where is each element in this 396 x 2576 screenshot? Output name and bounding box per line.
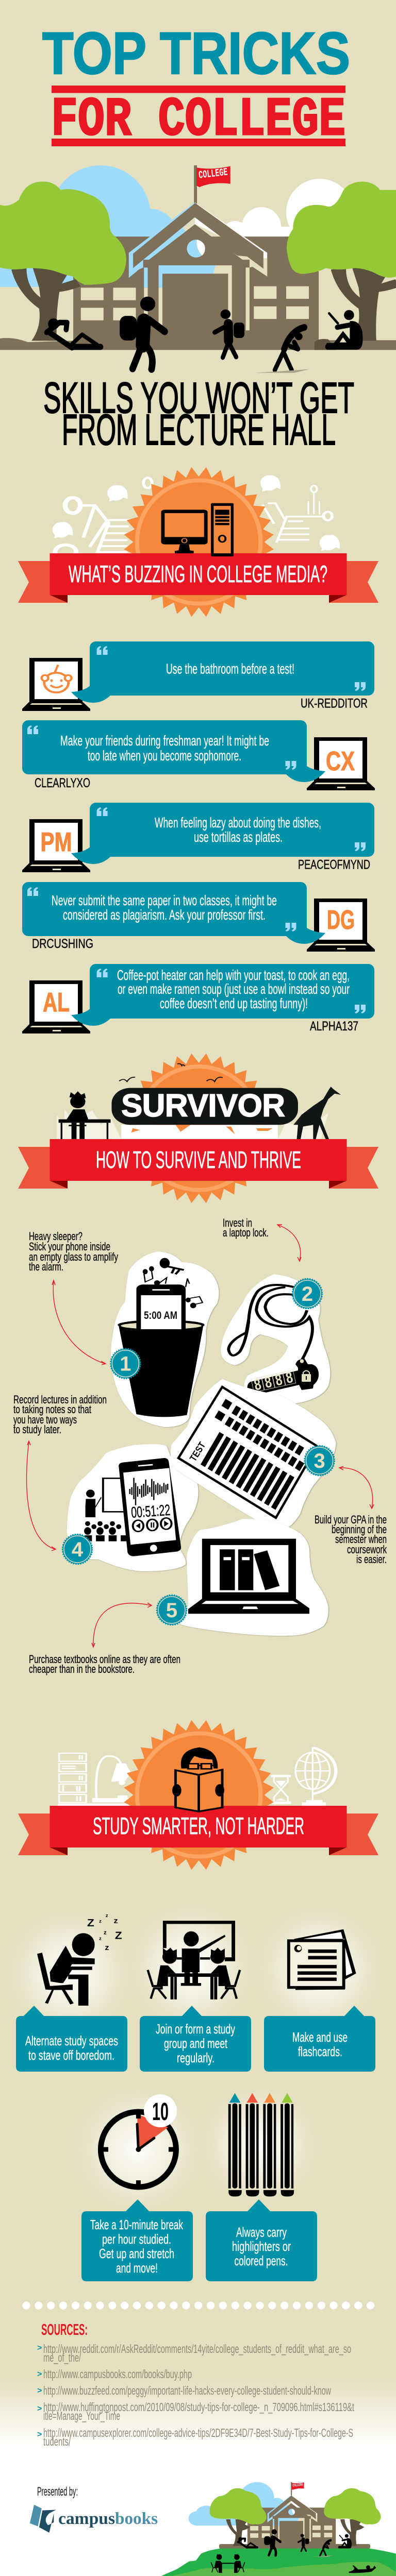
campusbooks logo: campus	[58, 2510, 115, 2528]
speech bubble: considered as plagiarism. Ask your professor first.	[63, 907, 266, 923]
quote 3	[22, 803, 374, 872]
badge 4	[63, 1534, 92, 1564]
tip 3 illustration: test paper	[171, 1379, 336, 1532]
tip 1 text	[29, 1230, 118, 1273]
right tree	[287, 181, 396, 341]
lock digits: 8	[263, 1374, 273, 1392]
books	[220, 1549, 235, 1590]
icon: clock	[101, 2094, 177, 2187]
computer tower overlap	[211, 551, 234, 556]
badge 2	[293, 1279, 322, 1309]
orange peeks through grass	[131, 1125, 273, 1134]
desk lamp	[58, 1756, 131, 1806]
tip box 2	[140, 2006, 251, 2072]
tip box 3: flashcards.	[298, 2044, 342, 2059]
dotted separator	[22, 2301, 374, 2310]
survivor scene	[57, 1064, 341, 1142]
tip box 4: and move!	[116, 2260, 158, 2276]
mini clouds	[189, 2482, 285, 2526]
tip box 4	[81, 2199, 193, 2281]
sources list: >	[37, 2430, 42, 2439]
hourglass	[271, 1775, 291, 1804]
zzz: z	[106, 1913, 108, 1918]
presented by: Presented by:	[37, 2485, 78, 2499]
mini campus scene	[157, 2482, 396, 2576]
laptop avatar: PM	[22, 819, 90, 872]
tip box 5: Always carry	[236, 2225, 287, 2240]
icon: clock: 10	[152, 2098, 169, 2126]
icon: desktop computer	[161, 503, 234, 556]
tip 4 text: to study later.	[13, 1423, 61, 1436]
book stack	[59, 1753, 86, 1803]
tip 2 text: Invest in	[223, 1216, 252, 1229]
speech bubble	[22, 882, 325, 944]
sources list: >	[37, 2370, 42, 2379]
laptop	[202, 1539, 296, 1600]
tip 1 text: Stick your phone inside	[29, 1240, 110, 1253]
icon: flashcards	[289, 1929, 356, 1990]
laptop avatar: reddit	[22, 658, 90, 711]
speech bubble	[71, 641, 374, 703]
username: DRCUSHING	[32, 937, 93, 951]
quote 1	[22, 641, 374, 711]
tip 5 text	[29, 1653, 180, 1675]
globe	[295, 1748, 336, 1806]
username: PEACEOFMYND	[298, 857, 370, 872]
arrow 5	[92, 1603, 152, 1647]
zzz: Z	[115, 1929, 122, 1941]
music notes	[143, 1258, 203, 1308]
background white lower area	[0, 2396, 396, 2576]
playback controls	[133, 1518, 172, 1532]
laptop avatar: PM: PM	[40, 827, 72, 857]
zzz	[87, 1913, 122, 1952]
icon glow backgrounds	[9, 1906, 381, 2210]
sources list: itle=Manage_Your_Time	[43, 2409, 120, 2422]
tip box 2: regularly.	[177, 2050, 214, 2065]
tip 4 text	[13, 1393, 107, 1436]
left tree	[0, 181, 126, 341]
arrow 3	[339, 1466, 374, 1509]
speech bubble: Use the bathroom before a test!	[166, 660, 294, 677]
icon: colored pens	[228, 2093, 294, 2196]
speech bubble	[71, 803, 374, 864]
section badge: media	[124, 467, 274, 617]
badge 1	[111, 1349, 140, 1378]
speech bubble: Make your friends during freshman year! It might be	[60, 733, 269, 749]
icon: sleeping at desk	[37, 1913, 122, 2006]
person at desk	[59, 1091, 111, 1142]
mini students	[238, 2529, 352, 2557]
icon: student reading book	[181, 1748, 218, 1770]
tip 2 illustration: laptop lock	[221, 1274, 330, 1405]
sources list: me_of_the/	[43, 2351, 81, 2364]
tip box 1: Alternate study spaces	[25, 2033, 118, 2048]
waveform	[130, 1478, 168, 1505]
tip 1 text: Heavy sleeper?	[29, 1230, 82, 1243]
zzz: z	[99, 1936, 102, 1941]
ribbon: how to survive	[18, 1139, 378, 1189]
white blob	[111, 1251, 219, 1427]
speech bubble	[71, 964, 374, 1026]
fade band	[0, 2380, 396, 2447]
username: UK-REDDITOR	[301, 697, 368, 711]
tip box 5: highlighters or	[232, 2239, 291, 2254]
badge 5	[157, 1595, 187, 1625]
pen 3	[263, 2093, 276, 2196]
badge 3: 3	[314, 1450, 325, 1472]
sky blue cloud	[0, 165, 178, 287]
badge 2: 2	[302, 1283, 313, 1306]
speech bubble: too late when you become sophomore.	[88, 748, 241, 764]
glass	[119, 1326, 203, 1417]
college campus scene	[0, 165, 396, 373]
recording phone	[119, 1458, 181, 1556]
tip box 4: Get up and stretch	[99, 2246, 174, 2261]
white cloud	[222, 179, 353, 248]
open book	[172, 1770, 224, 1811]
white blob	[177, 1519, 328, 1636]
tip 2 text	[223, 1216, 269, 1239]
badge 3	[305, 1446, 334, 1476]
combination lock	[248, 1358, 319, 1395]
campusbooks logo	[30, 2505, 158, 2533]
college building	[73, 165, 319, 350]
tip box 2: Join or form a study	[156, 2021, 235, 2037]
section badge: study	[124, 1720, 274, 1870]
speech bubble: use tortillas as plates.	[194, 829, 283, 845]
tip box 1	[16, 2006, 127, 2072]
tip box 3	[264, 2006, 375, 2072]
survivor title: SURVIVOR	[121, 1088, 285, 1124]
sources list: >	[37, 2404, 42, 2413]
sources list: tudents/	[43, 2435, 71, 2448]
tip box 4: Take a 10-minute break	[90, 2217, 184, 2232]
white grass	[57, 1109, 328, 1140]
lecture hall	[103, 1478, 126, 1512]
badge 1: 1	[120, 1353, 131, 1376]
laptop avatar: AL: AL	[43, 988, 70, 1018]
cable	[228, 1285, 312, 1360]
test sheet	[178, 1387, 317, 1518]
laptop avatar: CX: CX	[326, 747, 355, 776]
arrow 4	[27, 1441, 56, 1551]
arrow 1	[52, 1280, 106, 1365]
tip 2 text: a laptop lock.	[223, 1226, 269, 1239]
white blob	[171, 1379, 336, 1532]
speech bubble: coffee doesn’t end up tasting funny)!	[160, 995, 308, 1011]
pen 2	[246, 2093, 259, 2196]
ribbon: what's buzzing	[18, 551, 378, 603]
pen 4	[280, 2093, 294, 2196]
tip 4 text: Record lectures in addition	[13, 1393, 107, 1406]
tip 1 text: an empty glass to amplify	[29, 1250, 118, 1263]
quote 2	[22, 720, 375, 790]
circuit and speech bubble decoration	[53, 475, 340, 560]
phone	[136, 1284, 186, 1334]
giraffe	[293, 1087, 341, 1140]
mini ground	[219, 2544, 370, 2549]
tip 4 text: to taking notes so that	[13, 1403, 91, 1416]
large answer squares	[218, 1401, 229, 1419]
tip box 2: group and meet	[164, 2036, 228, 2051]
username: CLEARLYXO	[35, 776, 90, 790]
tip 1 text: the alarm.	[29, 1260, 63, 1273]
students at table and lying on grass	[211, 2554, 376, 2573]
tip box 1: to stave off boredom.	[28, 2047, 114, 2063]
mini trees	[210, 2488, 381, 2546]
tip box 4: per hour studied.	[102, 2231, 171, 2247]
mini building	[248, 2482, 336, 2549]
quote 4	[22, 882, 375, 952]
zzz: z	[99, 1919, 102, 1924]
tip 1 illustration: phone in glass	[111, 1251, 219, 1427]
sources list: >	[37, 2344, 42, 2352]
tip 4 text: you have two ways	[13, 1413, 77, 1426]
students	[47, 297, 363, 373]
arrow 2	[277, 1225, 301, 1261]
test label: TEST	[188, 1440, 208, 1464]
quote 5	[22, 964, 374, 1033]
username: ALPHA137	[310, 1019, 358, 1033]
campusbooks logo: books	[115, 2510, 158, 2528]
sources list: http://www.campusbooks.com/books/buy.php	[43, 2367, 192, 2381]
sources heading: SOURCES:	[41, 2320, 88, 2338]
icon: study group	[148, 1922, 240, 1999]
sources list	[37, 2342, 354, 2448]
subtitle	[43, 374, 354, 454]
laptop avatar: DG: DG	[327, 905, 355, 935]
tip 5 text: cheaper than in the bookstore.	[29, 1663, 135, 1675]
section badge: survivor	[124, 1054, 274, 1203]
ground strip	[0, 338, 396, 350]
badge 4: 4	[72, 1538, 84, 1561]
tip 5 text: Purchase textbooks online as they are often	[29, 1653, 180, 1666]
badge 5: 5	[166, 1599, 177, 1622]
phone clock: 5:00 AM	[144, 1310, 177, 1321]
birds	[119, 1064, 223, 1081]
zzz: z	[105, 1943, 109, 1952]
white blob	[67, 1444, 198, 1571]
laptop avatar: DG	[307, 899, 375, 952]
title	[42, 21, 350, 151]
lock digits	[251, 1368, 296, 1394]
green hill	[157, 2549, 396, 2576]
tip 3 text	[315, 1513, 387, 1566]
tip box 3: Make and use	[292, 2029, 348, 2045]
lock digits: 8	[274, 1371, 284, 1389]
lock digits: 8	[253, 1376, 263, 1394]
zzz: Z	[87, 1917, 94, 1929]
lock digits: 8	[284, 1369, 294, 1387]
survivor title pill	[111, 1088, 298, 1125]
pen 1	[228, 2093, 242, 2196]
tip box 5	[206, 2199, 317, 2281]
tip 4 illustration: lecture recording	[67, 1444, 198, 1571]
laptop avatar: CX	[307, 737, 375, 790]
study scene decoration	[58, 1748, 336, 1806]
ribbon: study smarter	[18, 1770, 378, 1855]
laptop avatar: AL	[22, 980, 90, 1033]
recording time: 00:51:22	[130, 1502, 171, 1521]
answer grid	[227, 1407, 302, 1469]
sources list: >	[37, 2386, 42, 2395]
white blob	[221, 1274, 330, 1405]
answer bars	[203, 1433, 292, 1509]
speech bubble	[22, 720, 325, 782]
tip box 5: colored pens.	[234, 2253, 288, 2268]
tip 5 illustration: online bookstore	[177, 1519, 328, 1636]
title line one: TOP TRICKS	[42, 21, 350, 87]
zzz: z	[104, 1930, 107, 1936]
zzz: z	[113, 1917, 118, 1925]
